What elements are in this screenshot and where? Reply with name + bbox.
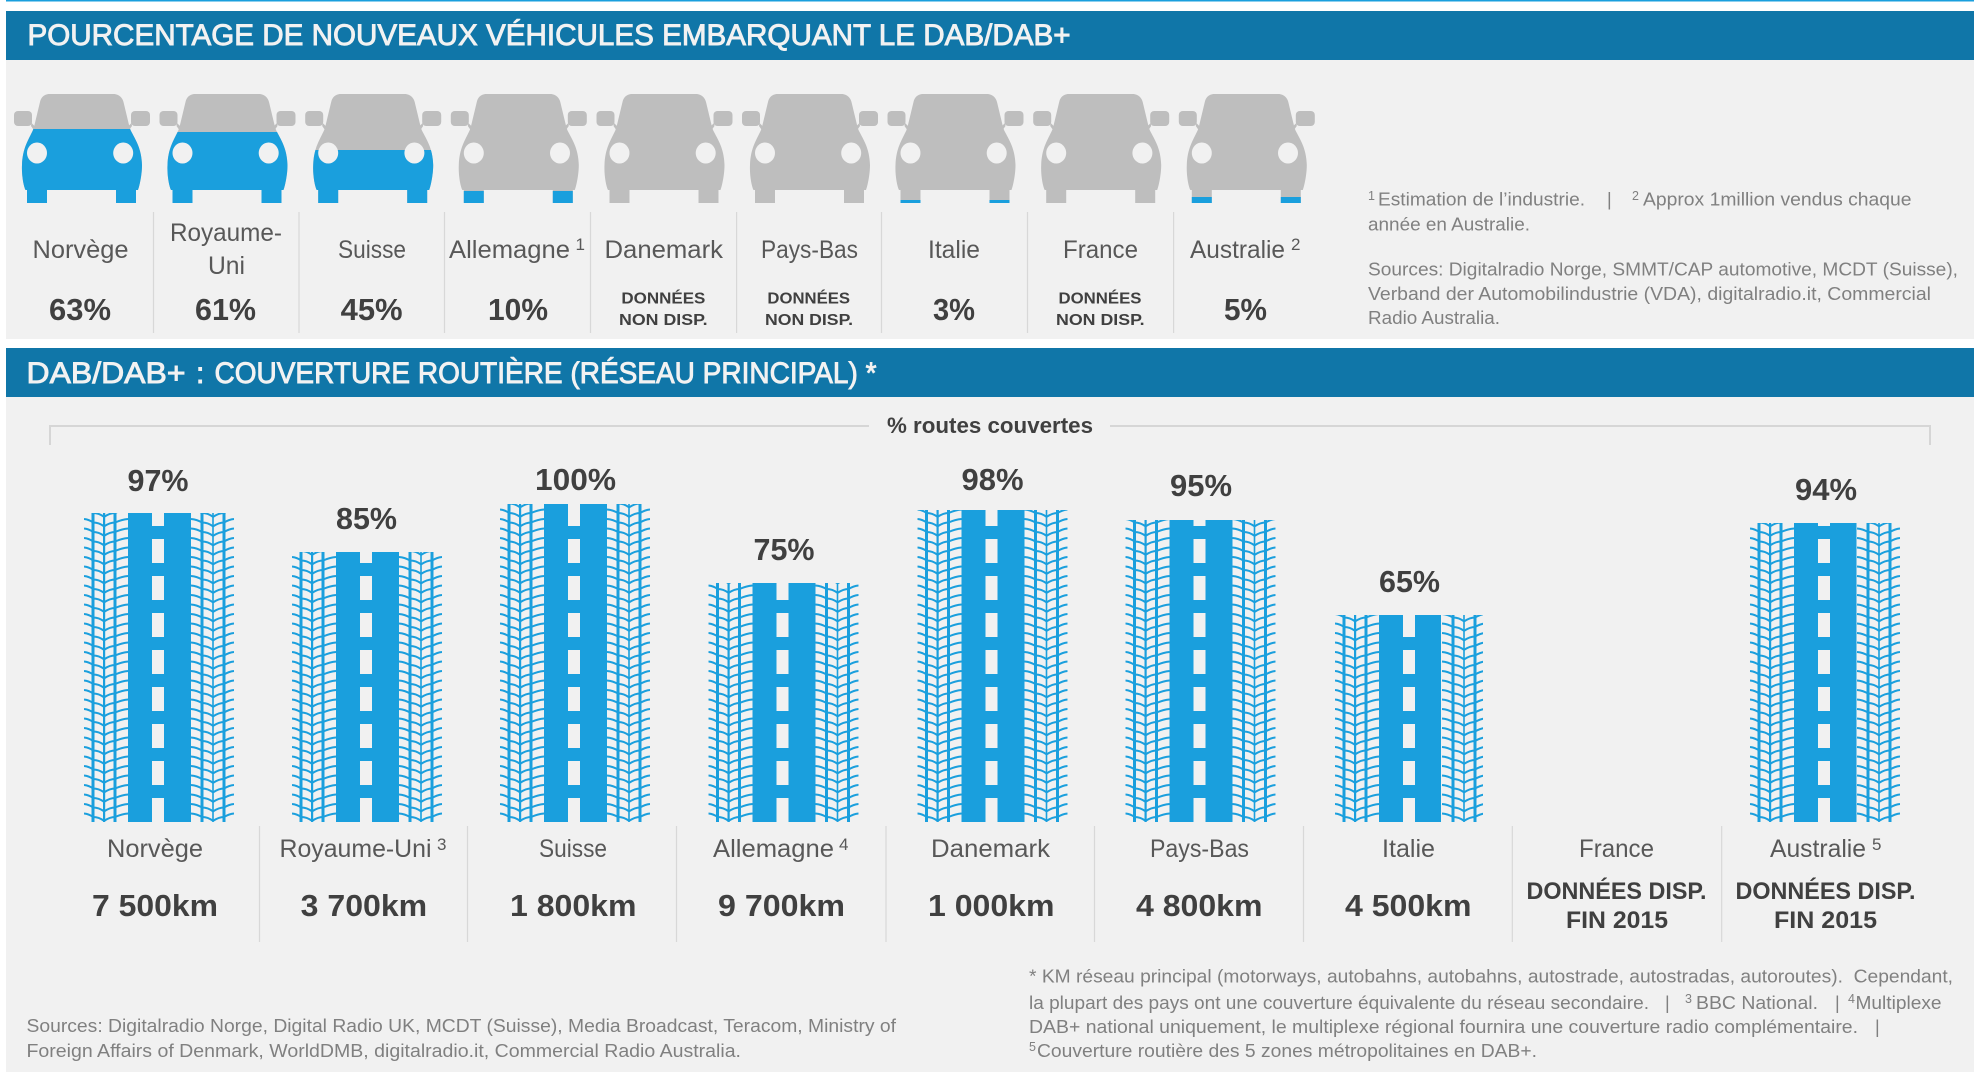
road stat: Allemagne: 9 700km (718, 888, 845, 923)
stat: Danemark: NON DISP. (619, 312, 708, 329)
road stat: France: FIN 2015 (1566, 907, 1668, 934)
stat: Allemagne: 1 (576, 235, 585, 254)
heading: road coverage: COUVERTURE ROUTIÈRE (RÉSEAU PRINCIPAL) * (214, 357, 877, 390)
footnotes: road coverage: DAB+ national uniquement, le multiplexe régional fournira une couverture radio complémentaire. (1029, 1017, 1858, 1037)
stat: Suisse: 45% (341, 292, 403, 327)
footnotes: road coverage: * KM réseau principal (motorways, autobahns, autobahns, autostrade, autostradas, autoroutes). Cependant, (1029, 967, 1953, 987)
stat: Pays-Bas: DONNÉES (767, 290, 850, 308)
heading: road coverage (6, 348, 1974, 397)
stat: Danemark (604, 236, 724, 329)
stat: Royaume-Uni: Uni (208, 252, 245, 280)
sources: road coverage: Foreign Affairs of Denmark, WorldDMB, digitalradio.it, Commercial Radio Australia. (26, 1041, 741, 1061)
panel: new vehicles (6, 60, 1974, 339)
road stat: Australie (1736, 835, 1916, 934)
tyre bar: Italie 65% (1335, 615, 1483, 822)
top accent line (6, 0, 1974, 2)
tyre bar: Pays-Bas 95% (1126, 520, 1276, 822)
road stat: Pays-Bas: Pays-Bas (1150, 835, 1249, 863)
stat: Royaume-Uni (170, 219, 282, 327)
footnotes and sources: new vehicles: Radio Australia. (1368, 308, 1500, 328)
panel: road coverage (6, 397, 1974, 1072)
road stat: Italie (1345, 835, 1472, 923)
footnotes and sources: new vehicles: Verband der Automobilindustrie (VDA), digitalradio.it, Commercial (1368, 284, 1931, 304)
road stat: Royaume-Uni: Royaume-Uni (280, 835, 432, 863)
road stat: Allemagne (713, 835, 848, 923)
stat: Norvège (32, 236, 128, 327)
road stat: Norvège (92, 835, 218, 923)
stat: Royaume-Uni: Royaume- (170, 219, 282, 247)
car: Norvège 63% (14, 94, 150, 203)
footnotes: road coverage: 4 (1848, 992, 1855, 1006)
value: 98%: 98% (962, 462, 1024, 497)
stat: Pays-Bas (761, 236, 858, 329)
road stat: Italie: 4 500km (1345, 888, 1472, 923)
axis bracket: % routes couvertes: % routes couvertes (887, 413, 1093, 438)
road stat: Australie: 5 (1872, 835, 1881, 854)
road stat: Pays-Bas: 4 800km (1136, 888, 1262, 923)
sources: road coverage: Sources: Digitalradio Norge, Digital Radio UK, MCDT (Suisse), Media Broadcast, Teracom, Ministry of (26, 1016, 897, 1036)
footnotes: road coverage: | (1665, 993, 1670, 1013)
footnotes and sources: new vehicles: Sources: Digitalradio Norge, SMMT/CAP automotive, MCDT (Suisse), (1368, 260, 1958, 280)
heading: road coverage: : (196, 357, 204, 390)
stat: Italie: 3% (933, 292, 975, 327)
value: 65%: 65% (1379, 564, 1440, 599)
road stat: Royaume-Uni: 3 (437, 835, 446, 854)
stat: Danemark: DONNÉES (621, 290, 705, 308)
stat: Norvège: Norvège (32, 236, 128, 264)
road stat: Suisse (510, 835, 636, 923)
car: Royaume-Uni 61% (160, 94, 296, 203)
footnotes and sources: new vehicles: année en Australie. (1368, 215, 1530, 235)
footnotes: road coverage: Multiplexe (1856, 993, 1942, 1013)
stat: France (1056, 236, 1145, 329)
stat: France: France (1063, 236, 1138, 264)
road stat: Suisse: Suisse (539, 835, 607, 863)
road stat: Suisse: 1 800km (510, 888, 636, 923)
road stat: Norvège: 7 500km (92, 888, 218, 923)
value: 85%: 85% (336, 501, 397, 536)
road stat: France (1526, 835, 1706, 934)
heading: new vehicles: POURCENTAGE DE NOUVEAUX VÉHICULES EMBARQUANT LE DAB/DAB+ (28, 19, 1070, 52)
road stat: Danemark: 1 000km (928, 888, 1054, 923)
footnotes and sources: new vehicles: | (1607, 190, 1612, 210)
tyre bar: Royaume-Uni 85% (292, 552, 442, 822)
stat: Australie (1190, 235, 1300, 327)
road stat: Allemagne: Allemagne (713, 835, 834, 863)
tyre bar: Australie 94% (1750, 523, 1900, 822)
road stat: France: DONNÉES DISP. (1526, 877, 1706, 905)
sources: road coverage (26, 1016, 897, 1061)
road stat: Allemagne: 4 (839, 835, 848, 854)
road stat: Royaume-Uni: 3 700km (301, 888, 427, 923)
footnotes and sources: new vehicles (1368, 189, 1958, 328)
value: 94%: 94% (1795, 472, 1857, 507)
stat: Italie: Italie (928, 236, 980, 264)
car: Danemark (596, 94, 732, 203)
car: Italie 3% (888, 94, 1024, 203)
road stat: Danemark (928, 835, 1054, 923)
road stat: Pays-Bas (1136, 835, 1262, 923)
car: Allemagne 10% (451, 94, 587, 203)
footnotes: road coverage: la plupart des pays ont une couverture équivalente du réseau secondaire. (1029, 993, 1649, 1013)
road stat: Australie: DONNÉES DISP. (1736, 877, 1916, 905)
stat: Allemagne: Allemagne (449, 236, 570, 264)
stat: Danemark: Danemark (604, 236, 724, 264)
axis bracket: % routes couvertes (50, 413, 1930, 445)
stat: Pays-Bas: Pays-Bas (761, 236, 858, 264)
road stat: Australie: Australie (1770, 835, 1866, 863)
footnotes: road coverage: 3 (1685, 992, 1692, 1006)
stat: Australie: 2 (1291, 235, 1300, 254)
footnotes and sources: new vehicles: Approx 1million vendus chaque (1643, 190, 1912, 210)
stat: Royaume-Uni: 61% (195, 292, 256, 327)
footnotes and sources: new vehicles: 1 (1368, 189, 1375, 203)
footnotes: road coverage: | (1835, 993, 1840, 1013)
tyre bar: Danemark 98% (918, 510, 1068, 822)
stat: Allemagne (449, 235, 585, 327)
road stat: Australie: FIN 2015 (1774, 907, 1877, 934)
footnotes and sources: new vehicles: 2 (1632, 189, 1639, 203)
stat: Norvège: 63% (49, 292, 111, 327)
stat: France: NON DISP. (1056, 312, 1145, 329)
value: 97%: 97% (128, 463, 188, 498)
road stat: Italie: Italie (1382, 835, 1435, 863)
footnotes: road coverage: | (1875, 1017, 1880, 1037)
car: Suisse 45% (305, 94, 441, 203)
car: Pays-Bas (742, 94, 878, 203)
footnotes: road coverage: BBC National. (1696, 993, 1818, 1013)
footnotes: road coverage: Couverture routière des 5 zones métropolitaines en DAB+. (1037, 1041, 1537, 1061)
car: France (1033, 94, 1169, 203)
road stat: France: France (1579, 835, 1654, 863)
value: 95%: 95% (1170, 468, 1232, 503)
road stat: Royaume-Uni (280, 835, 446, 923)
footnotes and sources: new vehicles: Estimation de l’industrie. (1378, 190, 1585, 210)
stat: Allemagne: 10% (488, 292, 548, 327)
stat: Australie: 5% (1224, 292, 1267, 327)
car: Australie 5% (1179, 94, 1315, 203)
tyre bar: Norvège 97% (84, 513, 234, 822)
footnotes: road coverage: 5 (1029, 1040, 1036, 1054)
tyre bar: Allemagne 75% (708, 583, 858, 822)
stat: Suisse: Suisse (338, 236, 406, 264)
road stat: Norvège: Norvège (107, 835, 203, 863)
stat: France: DONNÉES (1058, 290, 1142, 308)
heading: road coverage: DAB/DAB+ (26, 357, 186, 390)
heading: new vehicles (6, 11, 1974, 60)
value: 100%: 100% (535, 462, 616, 497)
tyre bar: Suisse 100% (500, 504, 650, 822)
stat: Italie (928, 236, 980, 327)
stat: Suisse (338, 236, 406, 327)
stat: Pays-Bas: NON DISP. (765, 312, 853, 329)
road stat: Danemark: Danemark (931, 835, 1051, 863)
stat: Australie: Australie (1190, 236, 1285, 264)
footnotes: road coverage (1029, 967, 1953, 1061)
value: 75%: 75% (754, 532, 814, 567)
